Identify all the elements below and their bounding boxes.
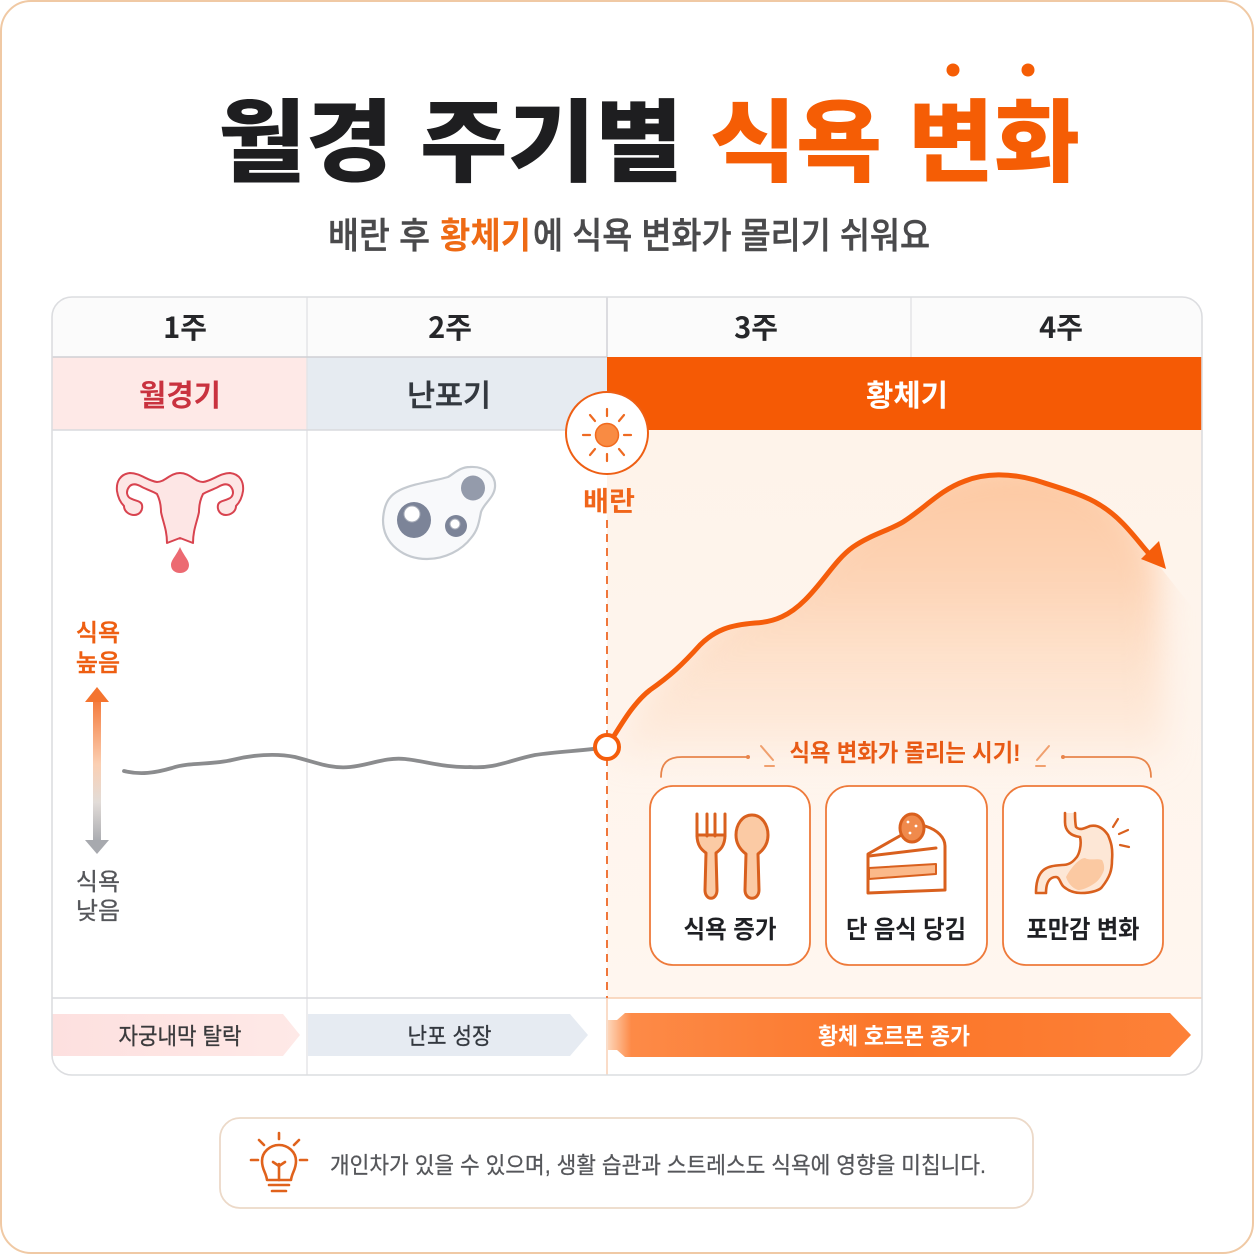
hormone arrow: follicle growth: 난포 성장 xyxy=(408,1023,492,1049)
week header row: 4주 xyxy=(1039,305,1083,347)
card: fullness change xyxy=(1003,786,1163,965)
axis high label xyxy=(76,620,120,677)
axis low label: 낮음 xyxy=(76,898,120,925)
week header row: 1주 xyxy=(163,305,207,347)
ovulation point marker xyxy=(595,735,619,759)
phase: menstrual xyxy=(52,357,307,430)
title: 식욕 변화 xyxy=(710,94,1080,194)
week header row: 2주 xyxy=(428,305,472,347)
subtitle: 황체기 xyxy=(440,215,531,256)
icon: sun xyxy=(583,409,631,461)
week header row xyxy=(52,297,1202,357)
phase: menstrual: 월경기 xyxy=(139,380,221,413)
icon: blood drop xyxy=(171,547,189,573)
card: sweet craving xyxy=(826,786,987,965)
panel: luteal background xyxy=(607,430,1202,998)
callout: appetite change period xyxy=(661,740,1151,777)
card: fullness change: 포만감 변화 xyxy=(1026,916,1140,944)
card: appetite increase: 식욕 증가 xyxy=(684,916,776,944)
hormone arrow: endometrium: 자궁내막 탈락 xyxy=(118,1023,242,1049)
axis low label: 식욕 xyxy=(76,869,120,896)
grid lines xyxy=(52,297,1202,1075)
flat appetite line xyxy=(124,747,607,773)
hormone arrow: progesterone xyxy=(608,1013,1191,1057)
icon: follicle xyxy=(383,467,495,559)
callout: tip box xyxy=(220,1118,1033,1208)
icon: light bulb xyxy=(251,1133,307,1191)
subtitle xyxy=(328,215,930,256)
ovulation badge xyxy=(566,392,648,474)
chart border xyxy=(52,297,1202,1075)
card: sweet craving: 단 음식 당김 xyxy=(846,916,966,944)
axis high label: 높음 xyxy=(76,650,120,677)
title xyxy=(218,64,1080,194)
appetite hump shading xyxy=(626,477,1174,753)
phase: follicular: 난포기 xyxy=(407,380,491,413)
rising appetite curve xyxy=(607,475,1166,747)
axis low label xyxy=(76,869,120,925)
callout: appetite change period: 식욕 변화가 몰리는 시기! xyxy=(790,740,1020,767)
hormone arrow: follicle growth xyxy=(308,1014,588,1056)
icon: cake xyxy=(868,814,945,893)
card: appetite increase xyxy=(650,786,810,965)
subtitle: 배란 후 xyxy=(328,215,430,256)
hormone arrow: progesterone: 황체 호르몬 종가 xyxy=(818,1023,970,1049)
callout: tip box: 개인차가 있을 수 있으며, 생활 습관과 스트레스도 식욕에 영향을 미칩니다. xyxy=(330,1152,986,1178)
ovulation label: 배란 xyxy=(583,487,635,517)
phase: luteal: 황체기 xyxy=(866,380,948,413)
hormone arrow: endometrium xyxy=(52,1014,300,1056)
panel: cycle chart xyxy=(52,297,1202,1075)
subtitle: 에 식욕 변화가 몰리기 쉬워요 xyxy=(533,215,930,256)
week header row: 3주 xyxy=(734,305,778,347)
axis arrow xyxy=(85,687,109,854)
axis high label: 식욕 xyxy=(76,620,120,647)
icon: uterus xyxy=(117,473,243,573)
ovulation dashed line xyxy=(606,520,608,998)
title: 월경 주기별 xyxy=(218,94,683,194)
icon: fork and spoon xyxy=(697,814,768,898)
icon: stomach xyxy=(1036,813,1129,893)
phase: follicular xyxy=(307,357,607,430)
phase: luteal xyxy=(607,357,1202,430)
